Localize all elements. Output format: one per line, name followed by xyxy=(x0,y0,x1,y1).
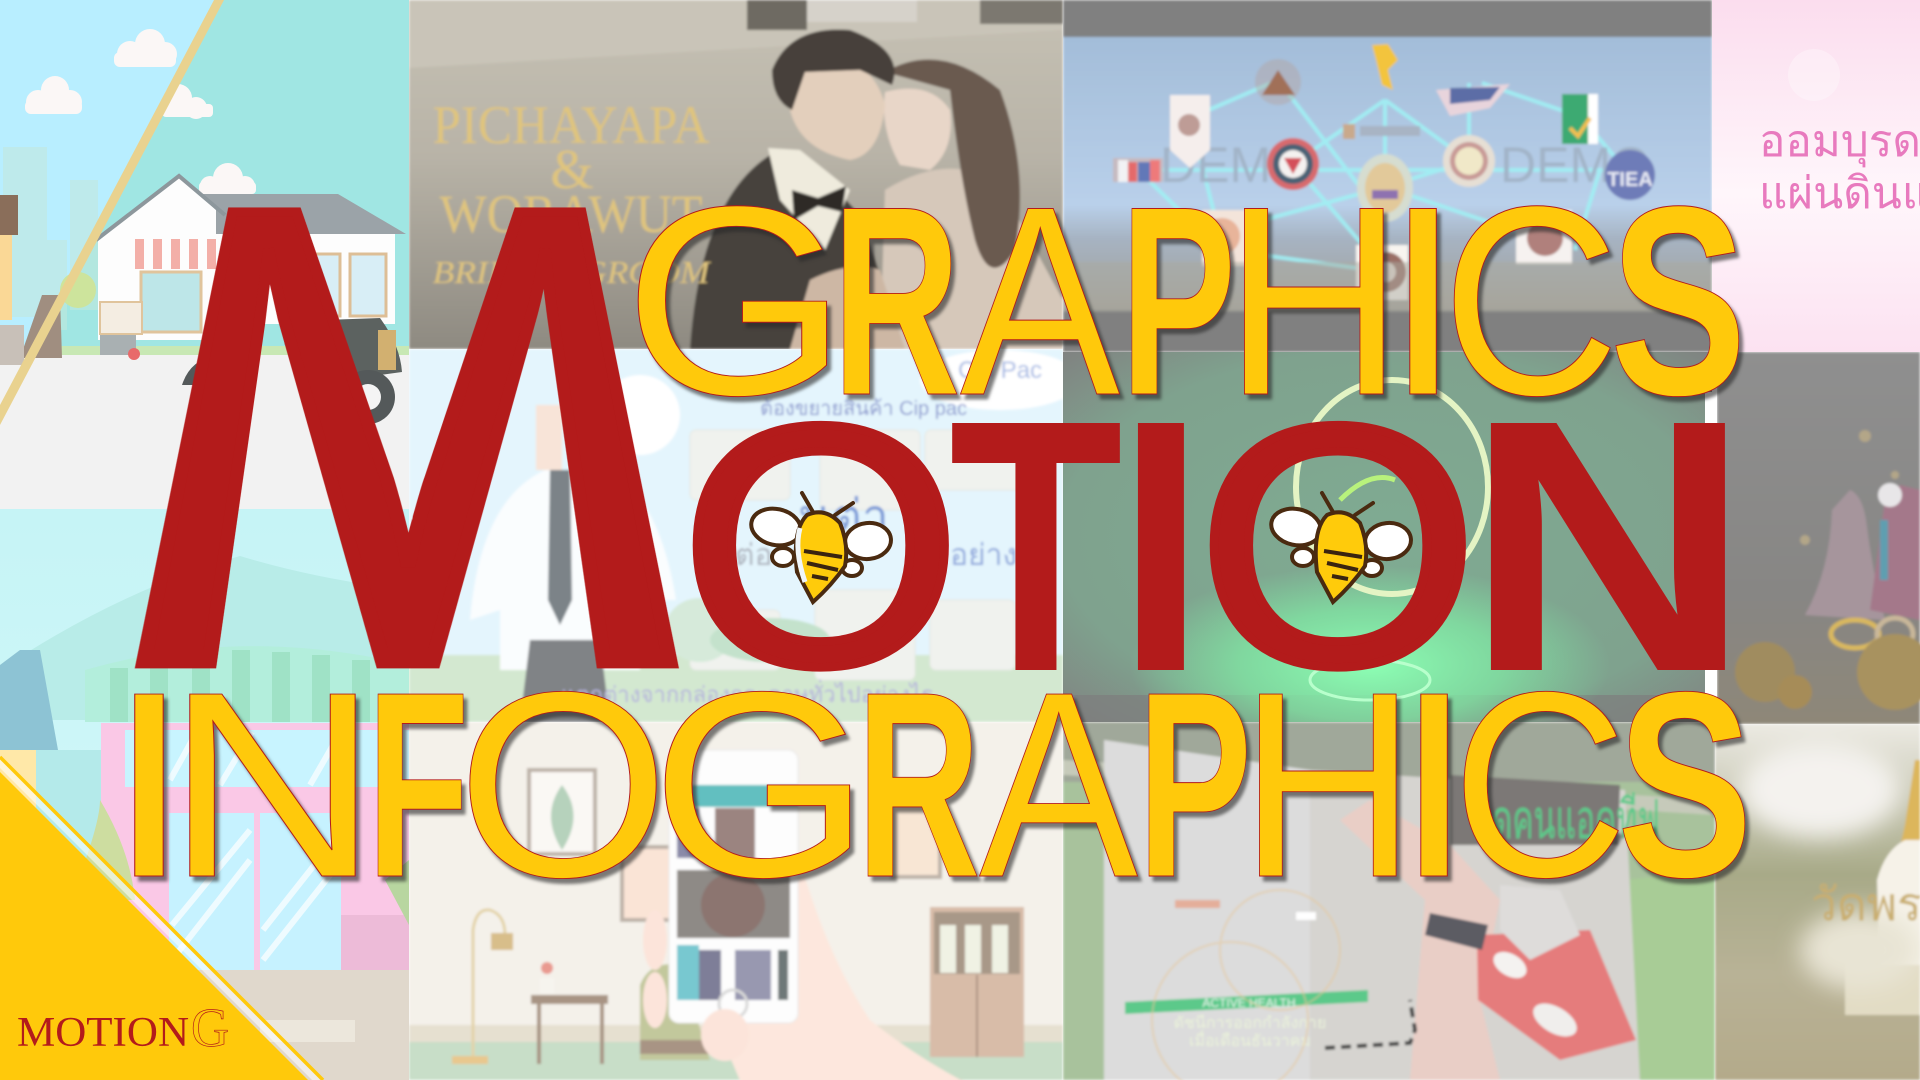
heading: OTION in red: O xyxy=(680,354,962,737)
heading: GRAPHICS: A xyxy=(960,151,1120,452)
panel: active health frame: เมื่อเดือนธันวาคม xyxy=(1189,1029,1311,1050)
panel: green glowing ring frame xyxy=(1063,352,1712,722)
icon: bee in first O xyxy=(748,493,893,602)
corner triangle badge xyxy=(0,757,323,1080)
panel: doctor health illustration: Cip Pac xyxy=(958,357,1042,384)
heading: GRAPHICS: S xyxy=(1610,150,1747,451)
heading: GRAPHICS: I xyxy=(1384,150,1463,451)
heading letter: large red M: M xyxy=(20,128,794,906)
heading: INFOGRAPHICS: O xyxy=(457,637,669,932)
panel: active health frame: ฉีดคนแอคทีฟ xyxy=(1470,790,1660,850)
heading: GRAPHICS: P xyxy=(1120,151,1236,452)
panel: network of organisation logos: DEMO xyxy=(1160,137,1310,193)
heading: INFOGRAPHICS: H xyxy=(1239,636,1416,932)
panel: wedding couple video frame: BRIDE & GROOM xyxy=(432,254,712,290)
heading: INFOGRAPHICS: P xyxy=(1138,638,1252,933)
panel: wedding couple video frame: WORAWUT xyxy=(440,184,703,244)
panel: house and street illustration xyxy=(0,0,409,509)
panel: active health frame xyxy=(1063,722,1715,1080)
heading: OTION in red: T xyxy=(949,345,1123,746)
panel: pastel shop front illustration xyxy=(0,509,409,1080)
heading: GRAPHICS: H xyxy=(1224,149,1403,451)
panel: doctor health illustration: อย่าง xyxy=(950,539,1017,572)
panel: active health frame: ACTIVE HEALTH xyxy=(1202,996,1296,1010)
panel: wedding couple video frame: PICHAYAPA xyxy=(432,95,710,155)
heading: INFOGRAPHICS: I xyxy=(107,638,191,933)
heading: INFOGRAPHICS: S xyxy=(1617,636,1753,932)
heading: GRAPHICS xyxy=(624,149,1747,452)
panel: doctor health illustration: ต้องขยายสินค้า Cip pac xyxy=(760,398,967,420)
panel: room with phone in hand xyxy=(409,722,1063,1080)
heading: GRAPHICS: G xyxy=(624,151,848,452)
logo wordmark: MotionG: G xyxy=(191,997,229,1058)
panel: pink Thai title card xyxy=(1712,0,1920,352)
panel: doctor health illustration: แตกต่างจากกล่องกระดาษทั่วไปอย่างไร xyxy=(561,679,933,707)
heading: INFOGRAPHICS: A xyxy=(979,638,1138,933)
panel: wedding couple video frame: & xyxy=(550,139,594,201)
heading: INFOGRAPHICS: F xyxy=(367,637,469,932)
heading: INFOGRAPHICS: N xyxy=(166,638,379,933)
icon: bee in second O xyxy=(1268,493,1413,602)
heading: OTION in red xyxy=(680,345,1752,747)
logo wordmark: MotionG: MOTION xyxy=(17,1010,189,1056)
heading: INFOGRAPHICS: G xyxy=(651,636,871,932)
heading: OTION in red: O xyxy=(1197,354,1479,737)
panel: doctor health illustration: นต่า xyxy=(798,491,889,544)
panel: pink Thai title card: ออมบุรด xyxy=(1759,117,1920,168)
panel: white stupa temple frame xyxy=(1715,724,1920,1080)
heading: INFOGRAPHICS xyxy=(107,636,1753,933)
heading: GRAPHICS: C xyxy=(1442,150,1620,451)
panel: network of organisation logos xyxy=(1063,0,1712,352)
icon: logos: TIEA xyxy=(1607,169,1653,191)
heading: INFOGRAPHICS: C xyxy=(1452,637,1628,932)
panel: network of organisation logos: DEMO xyxy=(1500,137,1650,193)
heading: GRAPHICS: R xyxy=(832,151,961,452)
heading: OTION in red: N xyxy=(1464,346,1752,747)
panel: wedding couple video frame xyxy=(409,0,1063,349)
panel: dark gold gowns frame xyxy=(1717,352,1920,724)
icon: logos xyxy=(1113,44,1655,300)
panel: doctor health illustration: ต่อ xyxy=(735,539,772,572)
heading: INFOGRAPHICS: I xyxy=(1395,638,1474,933)
panel: doctor health illustration xyxy=(409,349,1080,722)
panel: active health frame: ดัชนีการออกกำลังกาย xyxy=(1174,1014,1326,1032)
heading: INFOGRAPHICS: R xyxy=(856,638,981,933)
heading: OTION in red: I xyxy=(1117,345,1205,746)
logo wordmark: MotionG xyxy=(17,997,229,1058)
